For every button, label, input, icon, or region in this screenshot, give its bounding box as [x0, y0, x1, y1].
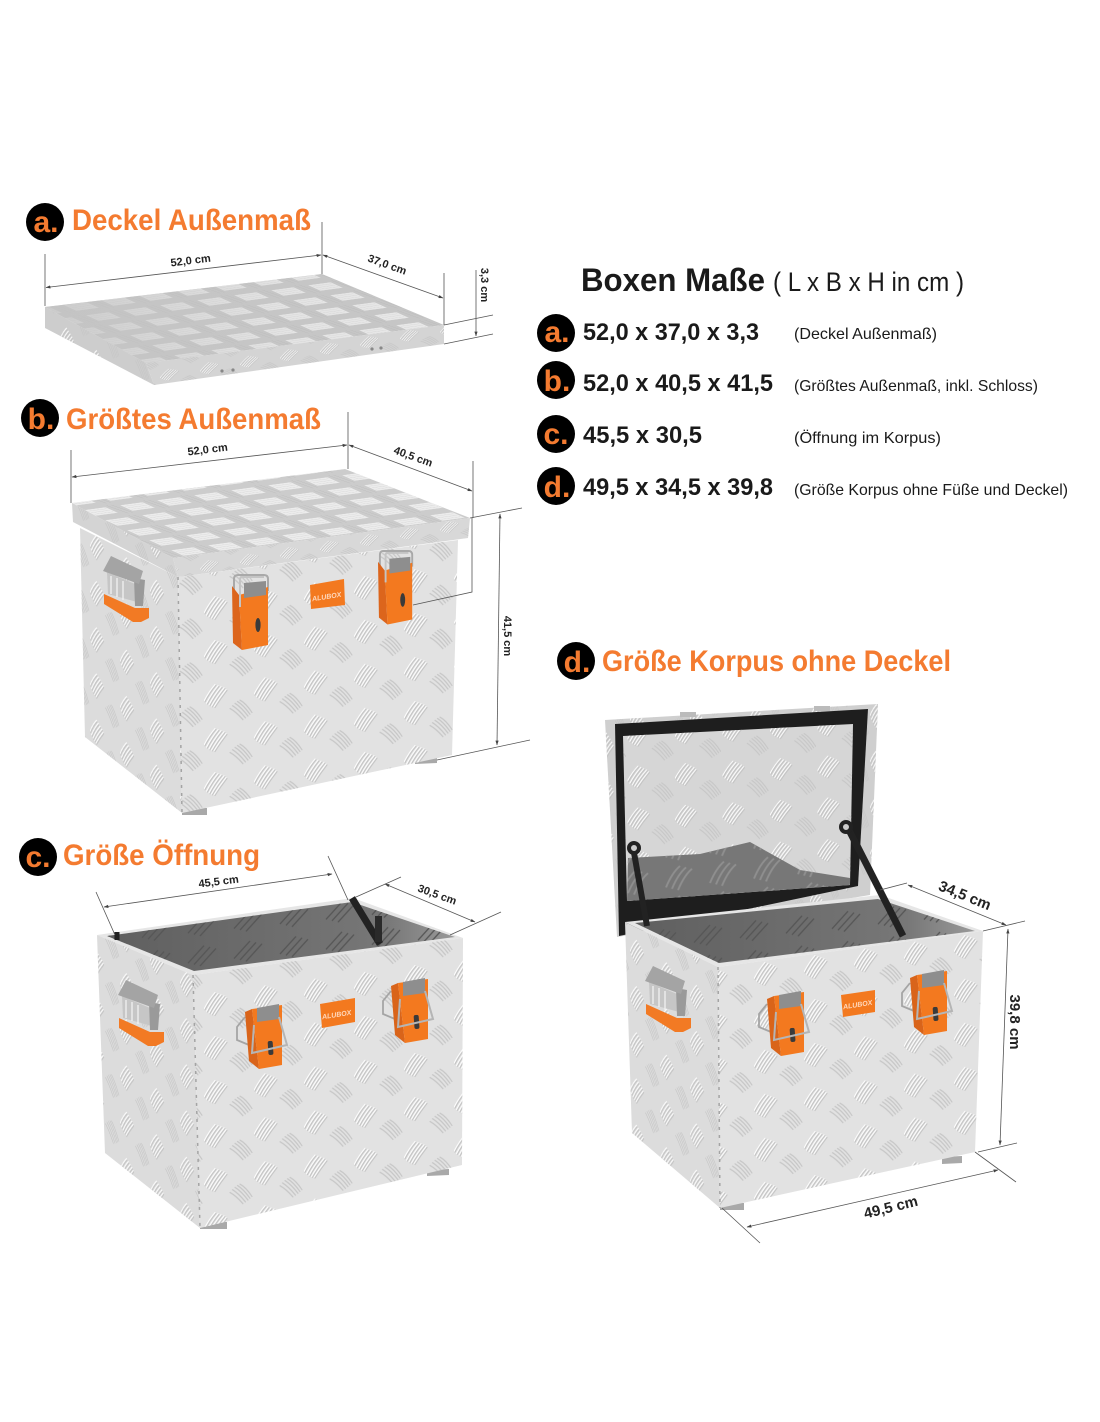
row a: (Deckel Außenmaß): [794, 326, 937, 343]
row a: a.: [544, 316, 570, 349]
dimensions b: 41,5 cm: [501, 616, 513, 656]
dimensions a: 3,3 cm: [478, 268, 490, 302]
heading: a: a.: [33, 206, 59, 239]
plate: [320, 998, 355, 1028]
row a: 52,0 x 37,0 x 3,3: [583, 319, 759, 346]
straps: [117, 898, 382, 944]
latch right: [902, 970, 952, 1035]
handle: [118, 980, 164, 1046]
row b: 52,0 x 40,5 x 41,5: [583, 370, 773, 397]
heading: c: c.: [25, 841, 51, 874]
row c: 45,5 x 30,5: [583, 422, 702, 449]
open lid: [605, 704, 878, 937]
panel: a. Deckel Außenmaß: [26, 203, 493, 385]
dimensions c: [96, 856, 501, 935]
row c: (Öffnung im Korpus): [794, 429, 941, 447]
box b image: [72, 469, 470, 815]
row b: b.: [544, 365, 570, 398]
heading: c: Größe Öffnung: [63, 839, 260, 872]
row d: (Größe Korpus ohne Füße und Deckel): [794, 482, 1068, 499]
dimensions d: 39,8 cm: [1006, 994, 1023, 1050]
heading: d: d.: [564, 646, 590, 679]
dimensions d: 49,5 cm: [862, 1193, 920, 1223]
dimensions b: 52,0 cm: [187, 442, 229, 458]
handle: [103, 556, 149, 622]
heading: c: [19, 838, 260, 876]
row a: [537, 314, 937, 352]
row c: [537, 415, 941, 453]
plate: ALUBOX: [321, 1010, 353, 1021]
handle: [645, 966, 691, 1032]
heading: d: Größe Korpus ohne Deckel: [602, 645, 951, 678]
dimensions d: 34,5 cm: [936, 878, 993, 914]
panel: c. Größe Öffnung: [19, 838, 501, 1229]
straps: [629, 822, 903, 936]
title: Boxen Maße: [581, 262, 765, 298]
lid a image: [45, 274, 444, 385]
panel: d. Größe Korpus ohne Deckel: [557, 642, 1025, 1243]
box d image: [605, 704, 983, 1210]
latch left: [232, 575, 268, 650]
latch left: [759, 991, 809, 1056]
plate: ALUBOX: [842, 1000, 874, 1011]
row d: 49,5 x 34,5 x 39,8: [583, 474, 773, 501]
title: [581, 262, 964, 298]
dimensions b: 40,5 cm: [392, 445, 434, 470]
heading: a: [26, 203, 311, 241]
box c image: [97, 898, 463, 1229]
title: ( L x B x H in cm ): [773, 267, 964, 297]
latch right: [378, 551, 412, 624]
latch left: [237, 1004, 287, 1069]
heading: a: Deckel Außenmaß: [72, 204, 311, 237]
heading: b: [21, 399, 321, 437]
dimensions c: 30,5 cm: [416, 883, 458, 908]
plate: [310, 579, 345, 609]
row b: [537, 361, 1038, 399]
heading: b: Größtes Außenmaß: [66, 403, 321, 436]
panel: Boxen Maße list: [537, 262, 1068, 505]
dimensions b: [71, 412, 530, 760]
plate: ALUBOX: [311, 592, 343, 603]
panel: b. Größtes Außenmaß: [21, 399, 530, 815]
dimensions c: 45,5 cm: [198, 874, 240, 890]
dimensions a: 37,0 cm: [366, 253, 408, 278]
row b: (Größtes Außenmaß, inkl. Schloss): [794, 378, 1038, 395]
row d: [537, 467, 1068, 505]
row c: c.: [543, 418, 569, 451]
plate: [841, 990, 875, 1017]
heading: b: b.: [28, 403, 54, 436]
row d: d.: [544, 471, 570, 504]
latch right: [383, 978, 433, 1043]
dimensions a: [45, 222, 493, 344]
dimensions a: 52,0 cm: [170, 253, 212, 269]
dimensions d: [722, 878, 1025, 1243]
